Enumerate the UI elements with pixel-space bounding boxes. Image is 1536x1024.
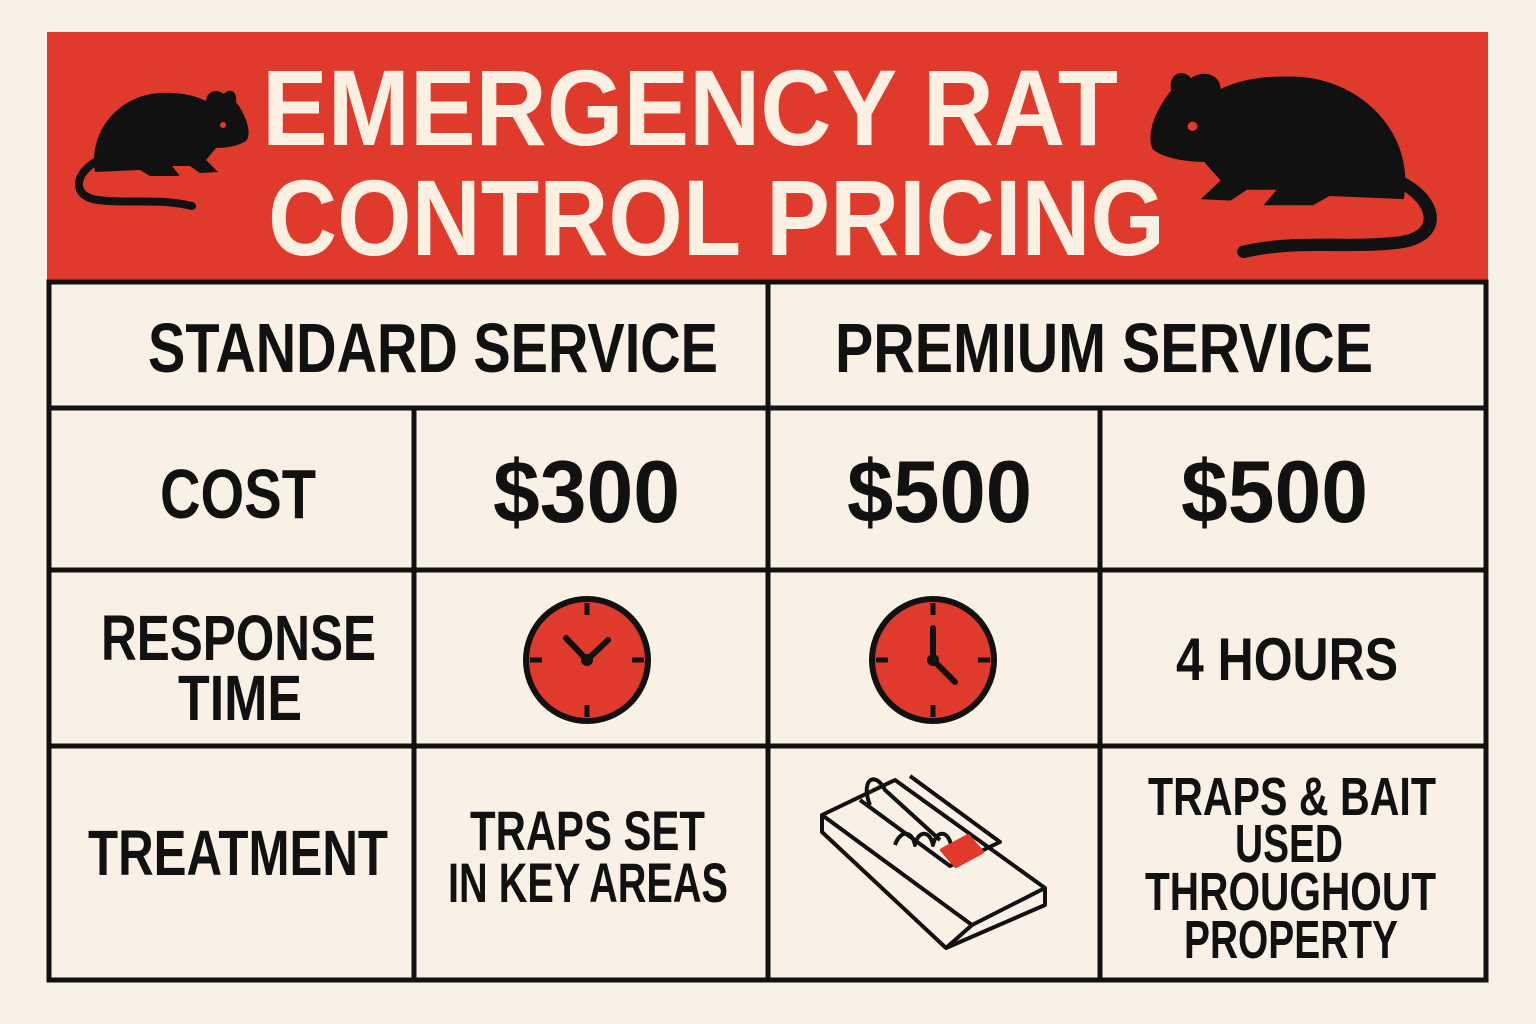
label: response time — [101, 602, 376, 734]
price: $300: $300 — [493, 442, 680, 541]
title: CONTROL PRICING — [268, 157, 1165, 278]
price: $500: $500 — [847, 442, 1032, 541]
text: traps set in key areas: TRAPS SET — [470, 799, 705, 862]
text: traps and bait: PROPERTY — [1184, 910, 1398, 970]
label: response time: TIME — [178, 662, 302, 734]
text: traps and bait: USED — [1235, 814, 1343, 874]
label: cost: COST — [160, 455, 316, 533]
pricing table — [49, 282, 1486, 980]
label: response time: RESPONSE — [101, 602, 376, 674]
icon: clock standard — [526, 599, 648, 721]
title: EMERGENCY RAT — [262, 47, 1118, 168]
icon: right rat — [1150, 73, 1430, 252]
text: traps and bait: THROUGHOUT — [1145, 862, 1436, 922]
title — [262, 47, 1165, 278]
text: traps set in key areas: IN KEY AREAS — [448, 851, 728, 914]
heading: standard service: STANDARD SERVICE — [148, 309, 718, 387]
price: $500 second: $500 — [1181, 442, 1368, 541]
text: traps and bait: TRAPS & BAIT — [1148, 767, 1436, 827]
icon: left rat — [79, 91, 249, 206]
label: treatment: TREATMENT — [88, 817, 388, 889]
heading: premium service: PREMIUM SERVICE — [835, 309, 1373, 387]
text: traps and bait — [1145, 767, 1436, 970]
icon: clock premium — [872, 599, 994, 721]
text: traps set in key areas — [448, 799, 728, 914]
text: 4 hours: 4 HOURS — [1176, 626, 1398, 693]
header banner — [47, 32, 1488, 282]
icon: mousetrap — [822, 776, 1045, 948]
